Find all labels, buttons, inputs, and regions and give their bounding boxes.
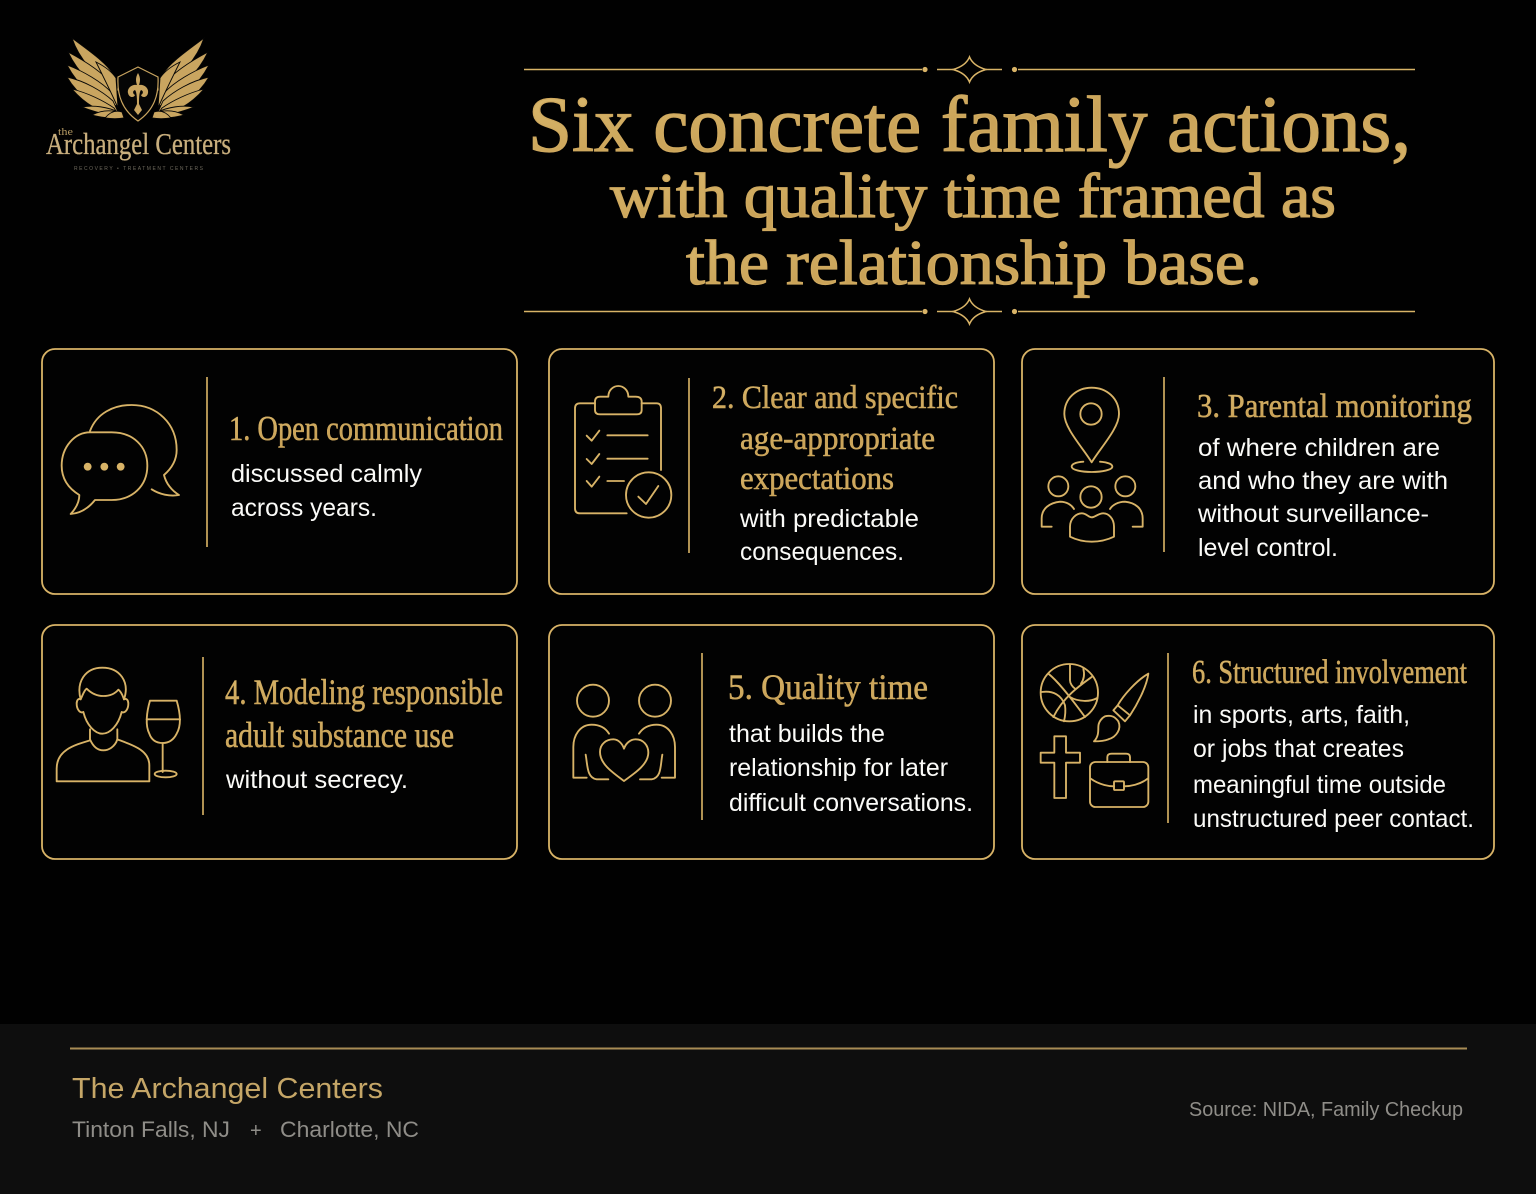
ornament: top rule	[524, 57, 1415, 82]
logo wordmark: RECOVERY • TREATMENT CENTERS	[74, 166, 204, 172]
body text: unstructured peer contact.	[1193, 805, 1474, 833]
title line 1: Six concrete family actions,	[528, 82, 1411, 169]
panel: 5 quality time	[549, 625, 994, 859]
heading: 2. Clear and specific	[712, 380, 958, 416]
body text: consequences.	[740, 538, 904, 566]
icon: clipboard checklist	[575, 386, 671, 518]
body text: relationship for later	[729, 754, 948, 782]
body text: that builds the	[729, 720, 885, 748]
panel: 1 open communication	[42, 349, 517, 594]
heading	[712, 380, 958, 497]
panel: 3 parental monitoring	[1022, 349, 1494, 594]
source note: Source: NIDA, Family Checkup	[1189, 1099, 1463, 1121]
title line 3: the relationship base.	[686, 227, 1262, 298]
footer locations: Tinton Falls, NJ	[72, 1117, 230, 1142]
body text: and who they are with	[1198, 467, 1448, 495]
heading: age-appropriate	[740, 421, 935, 457]
panel: 4 modeling	[42, 625, 517, 859]
body text	[739, 505, 919, 566]
body text: discussed calmly	[231, 460, 423, 488]
body text	[231, 460, 423, 522]
footer	[0, 1024, 1536, 1194]
icon: adult with wine glass	[57, 668, 180, 781]
footer locations: Charlotte, NC	[280, 1117, 419, 1142]
footer organization name: The Archangel Centers	[72, 1073, 383, 1105]
icon: location pin over family	[1042, 388, 1143, 542]
body text	[1197, 434, 1448, 562]
logo: The Archangel Centers	[46, 38, 231, 172]
title block	[524, 57, 1415, 324]
logo wordmark	[46, 126, 231, 172]
title line 2: with quality time framed as	[610, 160, 1336, 231]
panel: 6 structured involvement	[1022, 625, 1494, 859]
body text	[1193, 701, 1474, 833]
heading: expectations	[740, 461, 894, 497]
heading	[225, 672, 503, 755]
body text: or jobs that creates	[1193, 735, 1404, 763]
body text: level control.	[1198, 534, 1338, 562]
body text: with predictable	[739, 505, 919, 533]
icon: basketball, brush, cross, briefcase	[1041, 664, 1148, 807]
icon: winged shield	[67, 38, 209, 121]
body text: without surveillance-	[1197, 500, 1429, 528]
heading: 3. Parental monitoring	[1197, 388, 1472, 425]
footer locations	[72, 1117, 419, 1142]
body text: across years.	[231, 494, 377, 522]
body text: in sports, arts, faith,	[1193, 701, 1410, 729]
body text: meaningful time outside	[1193, 771, 1446, 799]
heading: 5. Quality time	[728, 667, 928, 707]
body text: difficult conversations.	[729, 789, 973, 817]
heading: 4. Modeling responsible	[225, 672, 503, 712]
heading: 1. Open communication	[229, 409, 503, 448]
body text	[729, 720, 973, 817]
icon: two people with heart	[573, 685, 675, 781]
logo wordmark: Archangel Centers	[46, 126, 231, 161]
ornament: bottom rule	[524, 299, 1415, 324]
logo wordmark: the	[58, 126, 73, 138]
body text: without secrecy.	[225, 766, 408, 794]
heading: adult substance use	[225, 715, 454, 755]
footer locations: +	[250, 1120, 262, 1142]
icon: speech bubbles	[62, 405, 179, 514]
body text: of where children are	[1198, 434, 1440, 462]
panel: 2 expectations	[549, 349, 994, 594]
heading: 6. Structured involvement	[1192, 654, 1467, 691]
